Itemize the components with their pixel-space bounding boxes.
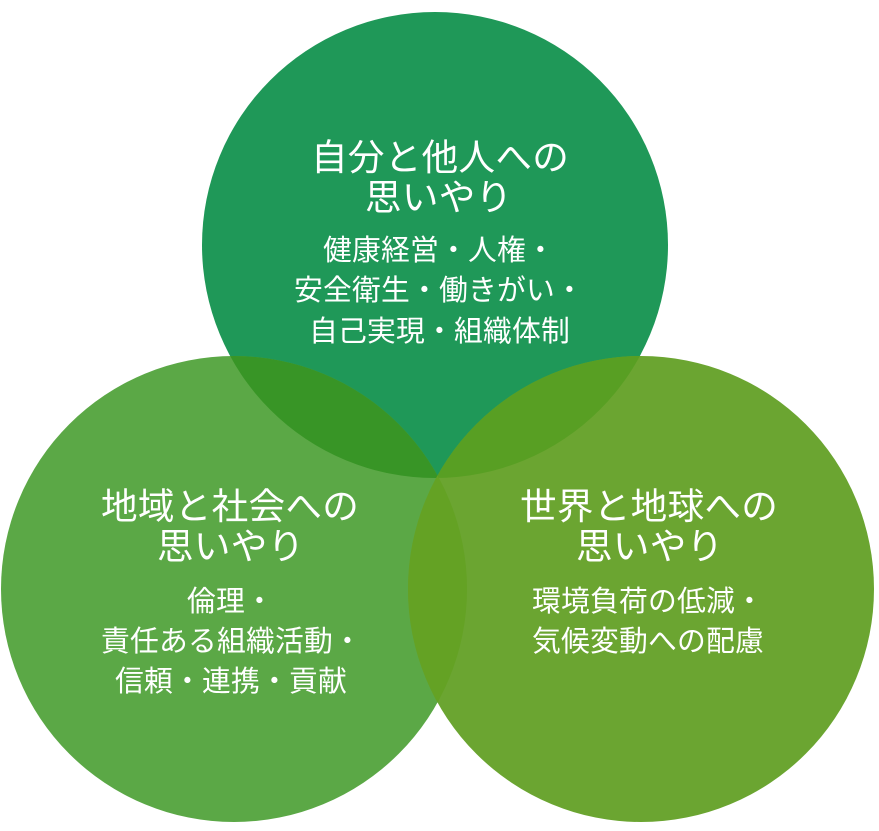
heading: left circle: 地域と社会への	[101, 486, 359, 527]
body: left circle line 1: 倫理・	[187, 586, 274, 618]
heading: top circle: 自分と他人への	[311, 137, 569, 178]
circle: community and society	[1, 356, 467, 822]
heading line 2: right circle: 思いやり	[576, 526, 724, 567]
text: right circle	[520, 486, 778, 658]
text: top circle	[294, 137, 584, 348]
body: right circle line 1: 環境負荷の低減・	[532, 586, 764, 618]
body: left circle line 3: 信頼・連携・貢献	[115, 666, 347, 698]
overlap: left and right	[408, 476, 467, 702]
overlap: top and right	[438, 356, 640, 478]
overlap: top and left	[230, 356, 438, 478]
heading line 2: left circle: 思いやり	[157, 526, 305, 567]
body: top circle line 3: 自己実現・組織体制	[309, 316, 570, 348]
body: left circle line 2: 責任ある組織活動・	[101, 626, 362, 658]
heading line 2: top circle: 思いやり	[365, 177, 513, 218]
body: top circle line 2: 安全衛生・働きがい・	[294, 275, 584, 307]
text: left circle	[101, 486, 362, 698]
body: right circle line 2: 気候変動への配慮	[532, 626, 764, 658]
circle: others and self	[202, 12, 668, 478]
circle: world and earth	[408, 356, 874, 822]
heading: right circle: 世界と地球への	[520, 486, 778, 527]
body: top circle line 1: 健康経営・人権・	[323, 235, 555, 267]
